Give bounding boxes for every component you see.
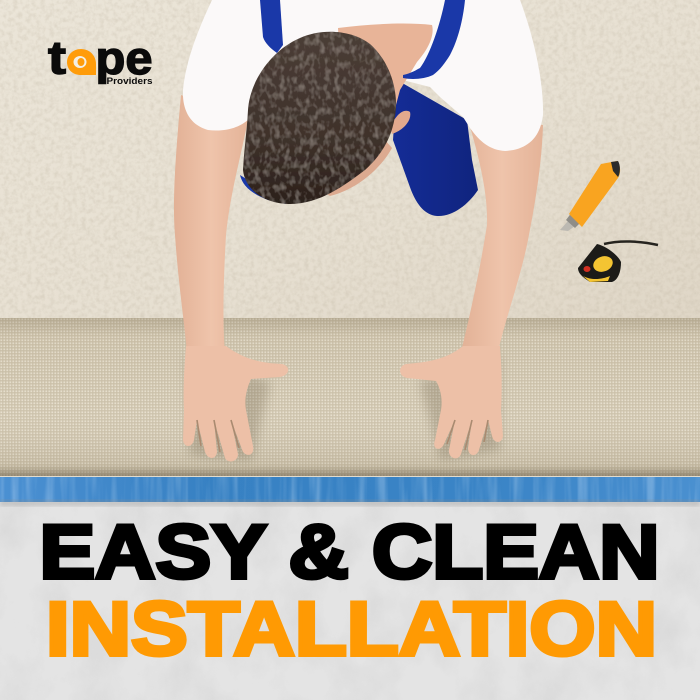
logo letters pe: pe [96, 32, 152, 84]
logo tagline: Providers [106, 76, 152, 86]
ear [390, 111, 410, 134]
heading: easy and clean: EASY & CLEAN [40, 510, 660, 595]
logo letter t: t [48, 32, 66, 84]
white t-shirt [183, 0, 543, 151]
left hand [183, 346, 288, 461]
logo: tape providers [48, 32, 152, 86]
back of neck below hair [320, 140, 392, 196]
utility knife [560, 161, 620, 231]
concrete panel [0, 500, 700, 700]
rolled carpet [0, 318, 700, 476]
soft shadow around hands [186, 356, 500, 460]
logo tape roll icon [67, 49, 96, 75]
hair [243, 32, 396, 204]
overall straps [240, 0, 465, 204]
neck [338, 24, 433, 120]
right finger gaps [447, 420, 488, 450]
left arm [174, 95, 248, 352]
tape measure [578, 241, 658, 282]
right arm [461, 120, 543, 352]
left finger gaps [197, 420, 239, 452]
trousers [393, 80, 478, 216]
person installing carpet [174, 0, 543, 461]
right hand [400, 346, 503, 458]
carpet floor background [0, 0, 700, 325]
heading: installation: INSTALLATION [46, 587, 657, 672]
blue tape band [0, 477, 700, 502]
